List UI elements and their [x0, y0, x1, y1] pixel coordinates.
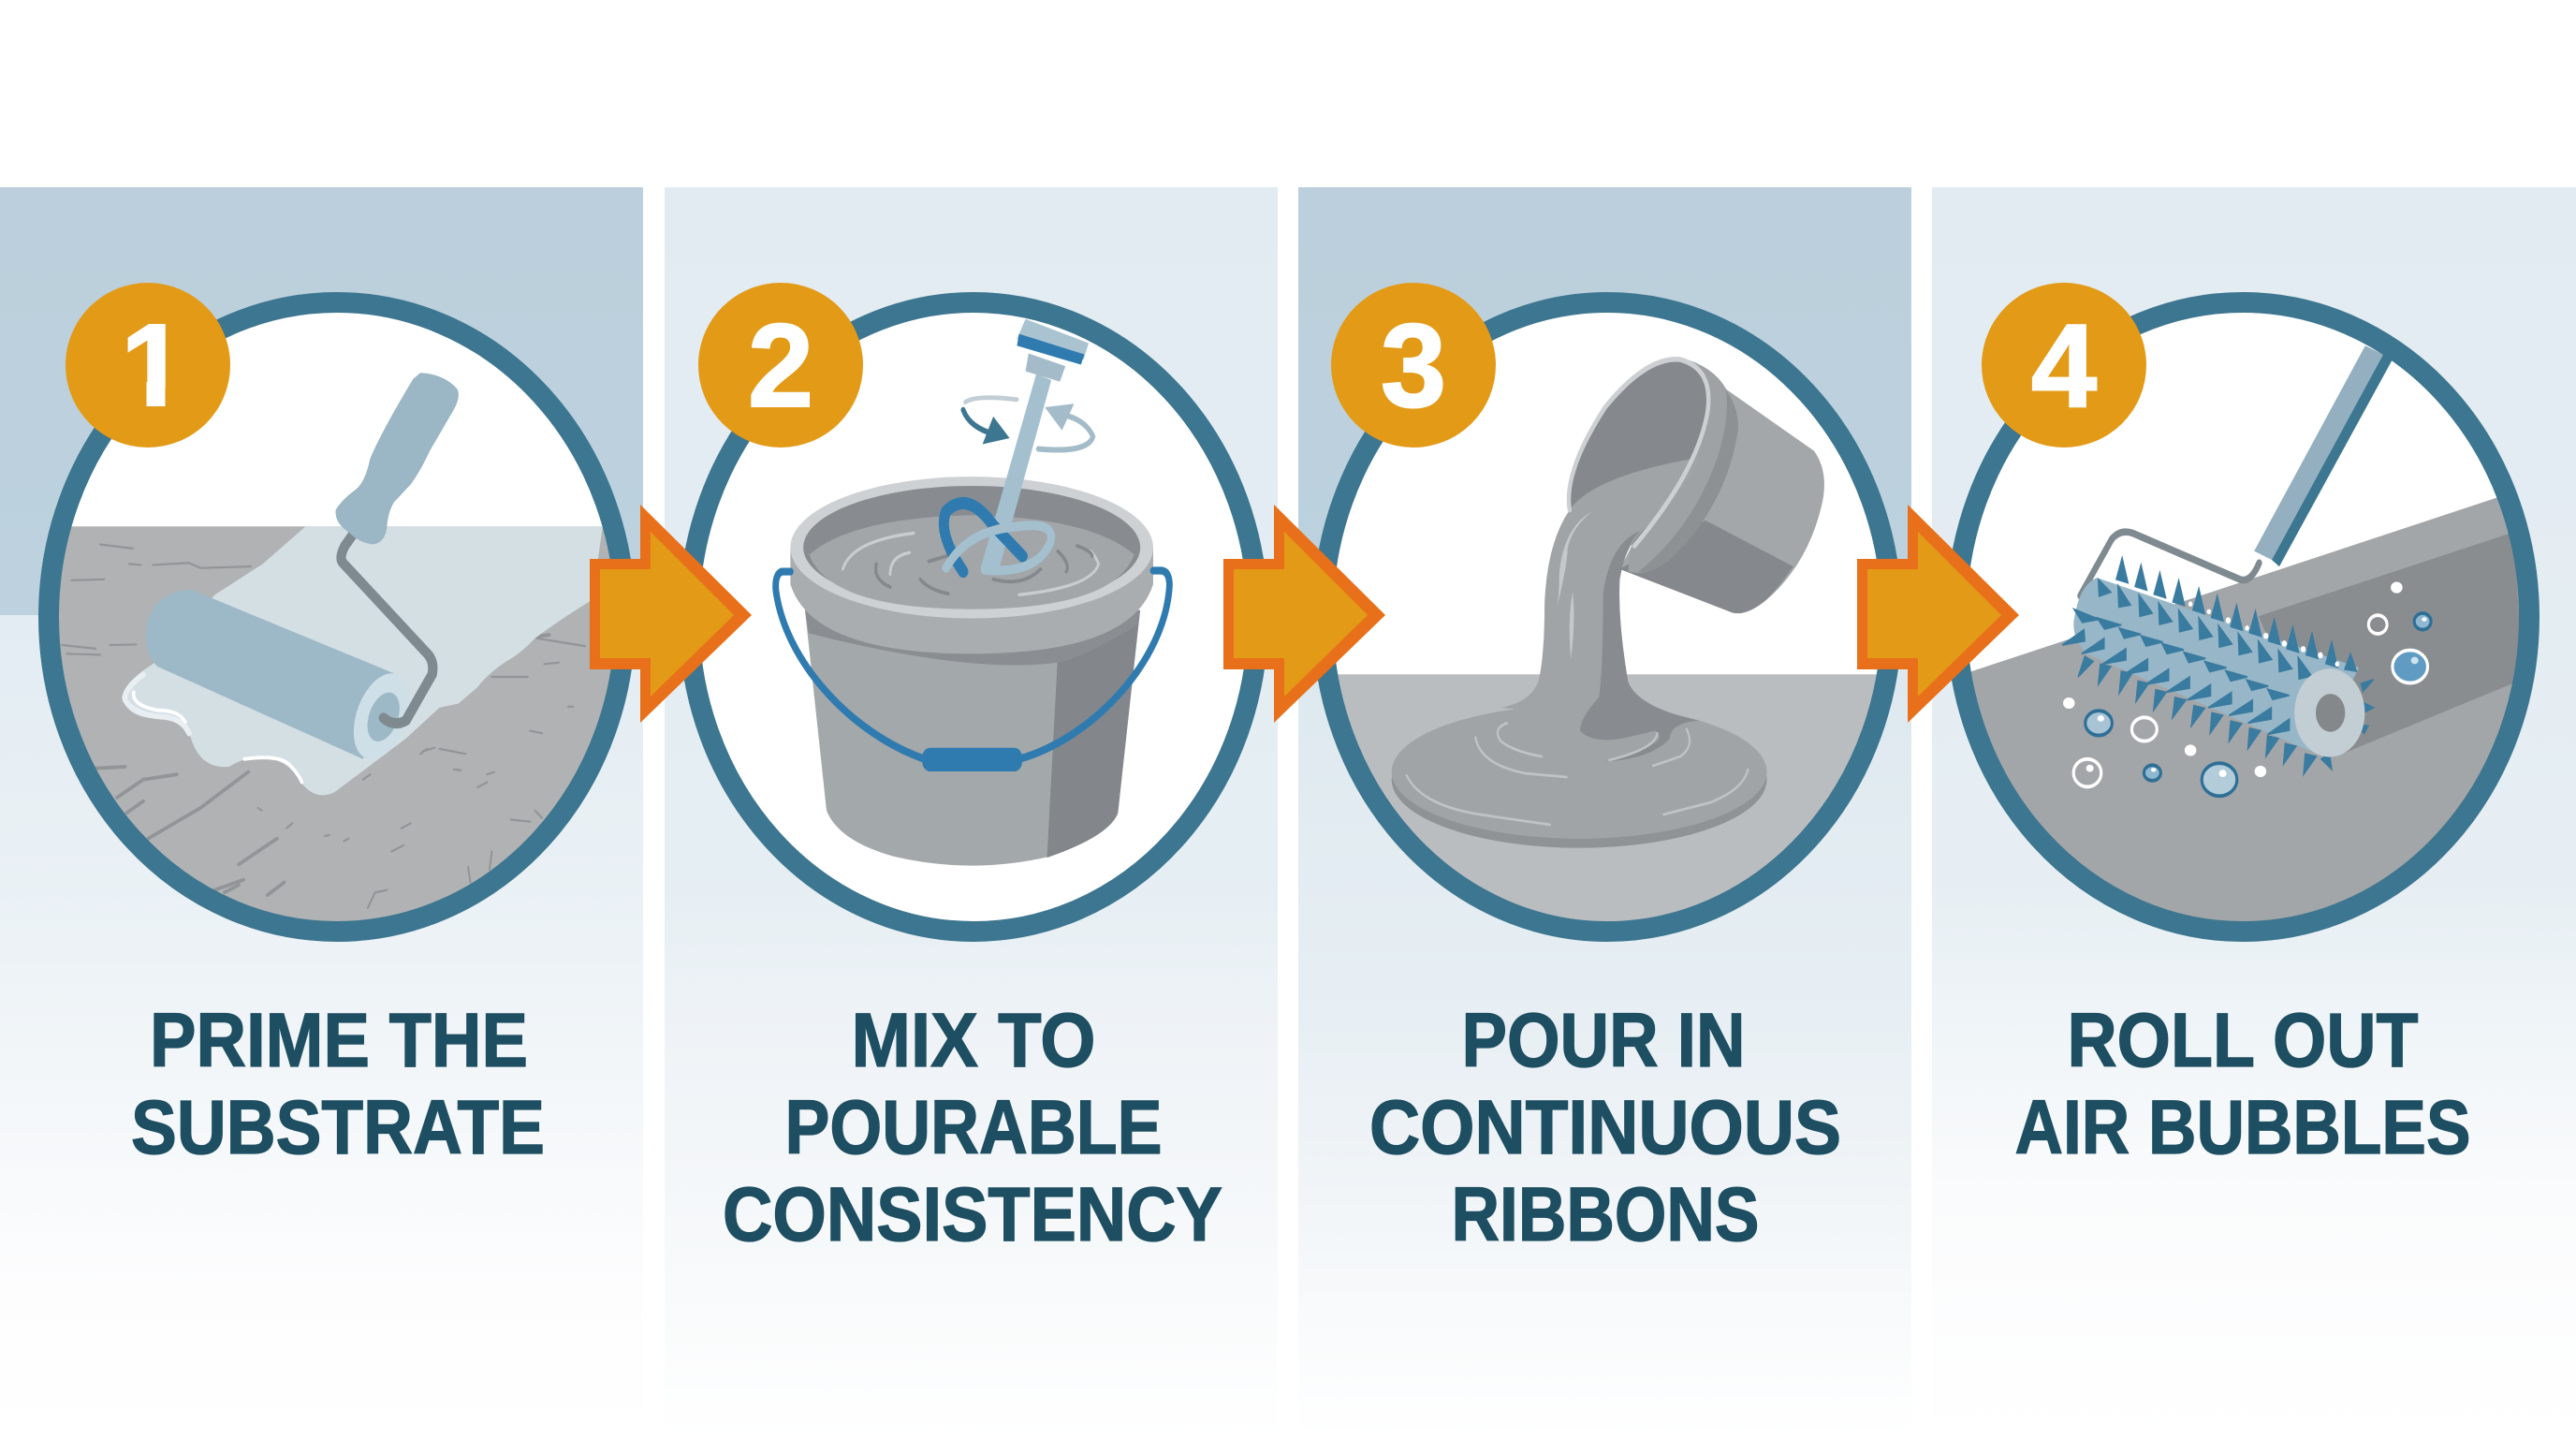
- panel: step 2 mix: [665, 187, 1278, 1438]
- caption 1: [131, 998, 545, 1170]
- bucket handle: [776, 570, 1169, 771]
- rim highlight: [1569, 360, 1708, 546]
- illustration: spiked roller and bubbles: [1971, 345, 2519, 921]
- spikes row lower: [2062, 630, 2290, 734]
- rolled stripe: [2259, 532, 2523, 754]
- roller end disc: [2294, 668, 2364, 757]
- number badge 4: [1982, 283, 2146, 448]
- mix surface: [810, 515, 1134, 609]
- floor: [1971, 498, 2519, 921]
- panel: step 4 roll: [1932, 187, 2576, 1155]
- caption 4: ROLL OUT: [2067, 998, 2419, 1083]
- arrow: step 1 to 2: [590, 505, 752, 723]
- circle interior 3: [1323, 302, 1892, 932]
- circle frame 1: [49, 302, 625, 932]
- illustration: pouring bucket and puddle: [1338, 357, 1877, 921]
- bucket rim band: [1629, 360, 1726, 573]
- spikes row bottom: [2078, 656, 2374, 774]
- spikes row middle: [2074, 609, 2290, 699]
- spikes row upper middle: [2099, 580, 2311, 679]
- blue bubbles: [2086, 613, 2431, 796]
- roller cover: [146, 590, 399, 759]
- floor: [1338, 674, 1877, 921]
- concrete floor: [59, 526, 610, 921]
- bucket rim top: [790, 477, 1153, 618]
- circle interior 2: [689, 302, 1258, 932]
- bucket body: [1619, 389, 1824, 613]
- caption 4: [2014, 998, 2471, 1170]
- number badge 1: 1: [121, 300, 186, 432]
- panel 1 background: [0, 187, 643, 1438]
- white dots: [2063, 582, 2403, 777]
- panel 3 background: [1298, 187, 1911, 1438]
- bucket inner wall: [803, 486, 1140, 609]
- bucket shaded side: [1047, 615, 1139, 858]
- number badge 4: 4: [2031, 300, 2097, 432]
- roller frame wire: [342, 527, 432, 724]
- caption 2: [723, 998, 1222, 1257]
- bucket body: [805, 610, 1140, 866]
- swirl marks: [842, 533, 1099, 594]
- spiked roller body: [2073, 578, 2359, 754]
- caption 4: AIR BUBBLES: [2014, 1085, 2471, 1170]
- illustration: bucket and mixer: [776, 319, 1169, 866]
- roller end cap: [354, 673, 399, 756]
- spikes row top: [2116, 558, 2356, 671]
- number badge 3: 3: [1381, 300, 1446, 432]
- stream shadow: [1580, 531, 1699, 762]
- band under rim: [805, 610, 1140, 665]
- caption 3: RIBBONS: [1451, 1172, 1760, 1257]
- number badge 2: [698, 283, 863, 448]
- circle interior 4: [1956, 302, 2529, 932]
- mixer paddle: [944, 503, 1051, 572]
- circle interior 1: [49, 302, 625, 932]
- caption 1: SUBSTRATE: [131, 1085, 545, 1170]
- number badge 3: [1331, 283, 1496, 448]
- mixer collar and head: [1017, 319, 1089, 382]
- small dots along roller: [2170, 594, 2339, 667]
- number badge 1: [66, 283, 230, 448]
- caption 2: POURABLE: [784, 1085, 1163, 1170]
- caption 2: CONSISTENCY: [723, 1172, 1222, 1257]
- caption 1: PRIME THE: [150, 998, 528, 1083]
- rotation arrows: [963, 398, 1093, 450]
- pour stream: [1501, 459, 1690, 710]
- hollow white rings: [2073, 615, 2387, 786]
- liquid highlights: [1558, 511, 1592, 659]
- roller frame: [2080, 532, 2260, 595]
- number badge 2: 2: [748, 300, 813, 432]
- caption 3: [1369, 998, 1841, 1257]
- panel: step 3 pour: [1298, 187, 1911, 1296]
- bucket shaded underside: [1619, 521, 1793, 613]
- caption 2: MIX TO: [852, 998, 1095, 1083]
- caption 3: CONTINUOUS: [1369, 1085, 1841, 1170]
- primer coat: [122, 526, 603, 795]
- primer highlights: [124, 674, 189, 733]
- mixer shaft: [980, 374, 1051, 574]
- arrow: step 2 to 3: [1223, 505, 1385, 723]
- circle frame 2: [689, 302, 1258, 932]
- panel: step 1 prime the substrate: [0, 187, 643, 1167]
- puddle: [1392, 705, 1767, 848]
- bucket mouth: [1569, 360, 1708, 546]
- arrow: step 3 to 4: [1857, 505, 2019, 723]
- illustration: roller priming concrete floor: [19, 373, 650, 968]
- panel 2 background: [665, 187, 1278, 1438]
- panel 4 background: [1932, 187, 2576, 1438]
- bucket rim side: [790, 548, 1153, 653]
- roller handle: [336, 373, 459, 545]
- pole: [2254, 345, 2393, 566]
- caption 3: POUR IN: [1462, 998, 1745, 1083]
- floor cracks: [62, 545, 585, 908]
- circle frame 3: [1323, 302, 1892, 932]
- circle frame 4: [1956, 302, 2529, 932]
